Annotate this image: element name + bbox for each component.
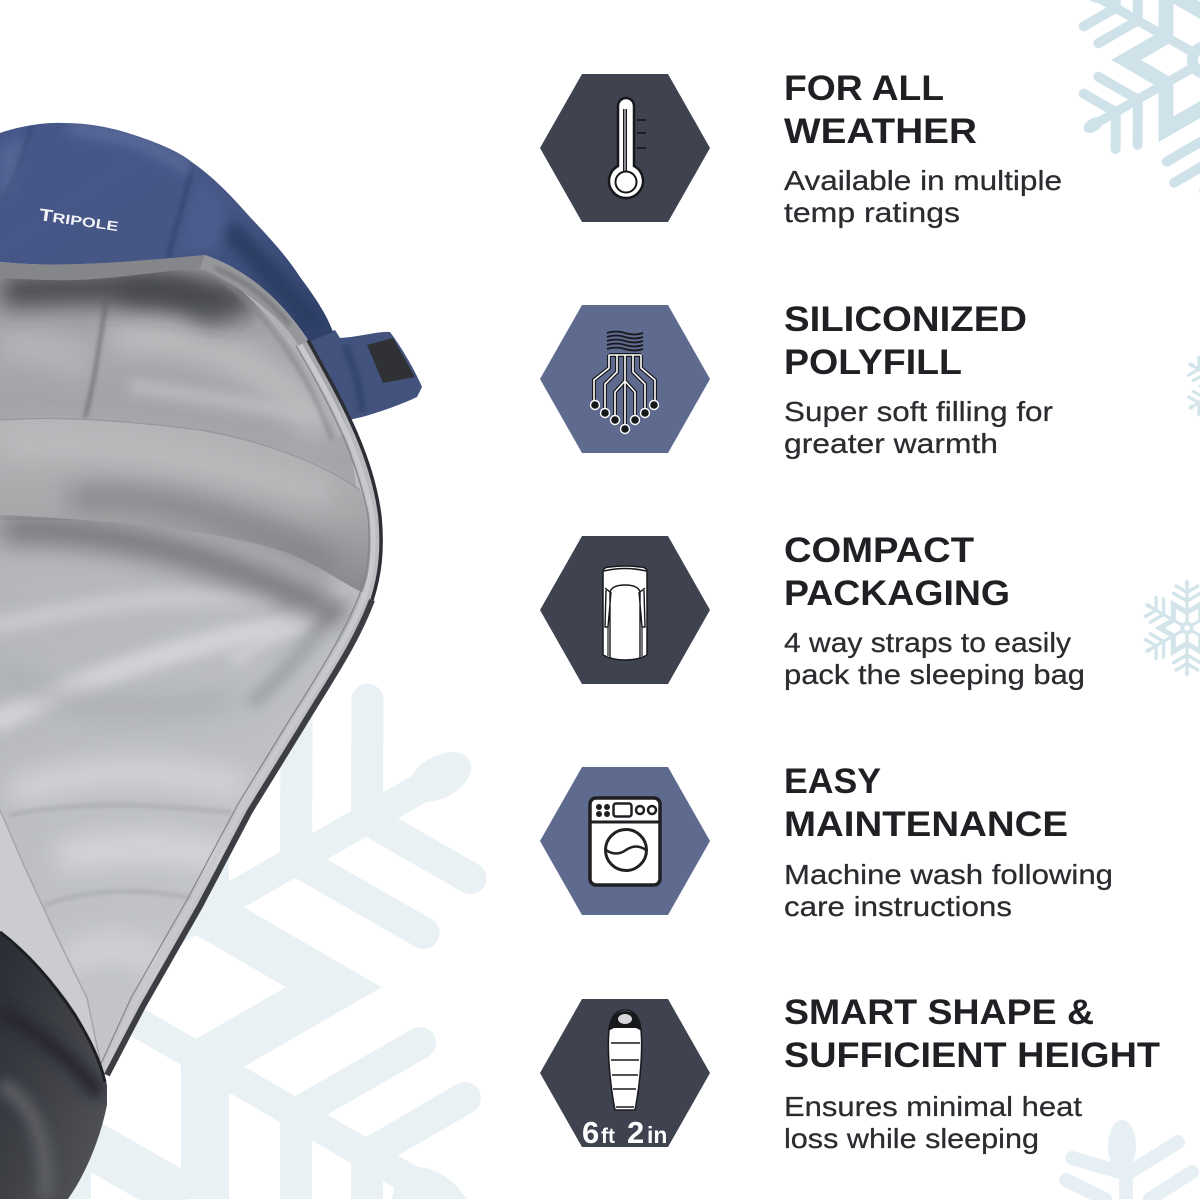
snowflake: right edge small xyxy=(1138,580,1200,676)
hexagon with mummy bag icon and height: in xyxy=(647,1122,667,1148)
hood lining lip xyxy=(0,255,207,280)
heading: SILICONIZED xyxy=(784,299,1027,339)
hexagon with mummy bag icon and height: ft xyxy=(601,1125,615,1148)
upper dome xyxy=(0,270,360,520)
heading: COMPACT xyxy=(784,530,974,570)
feature 4: easy maintenance xyxy=(540,761,1113,922)
snowflake: top right xyxy=(1064,0,1200,201)
photo: sleeping bag xyxy=(0,123,422,1199)
lower panel wrinkles xyxy=(0,590,345,960)
feature 2: siliconized polyfill xyxy=(540,299,1053,459)
heading: MAINTENANCE xyxy=(784,804,1068,844)
hood outer shell xyxy=(0,123,333,342)
heading: EASY xyxy=(784,761,881,801)
zipper edge xyxy=(100,340,381,1075)
hexagon with washing machine icon xyxy=(540,767,710,915)
hexagon with mummy bag icon and height: 2 xyxy=(627,1115,644,1150)
description: Ensures minimal heat xyxy=(784,1091,1082,1122)
description: 4 way straps to easily xyxy=(784,627,1071,658)
description: pack the sleeping bag xyxy=(784,659,1085,690)
hexagon with thermometer icon xyxy=(540,74,710,222)
snowflake: right edge partial xyxy=(1182,341,1200,431)
bolster xyxy=(0,418,372,592)
hexagon with mummy bag icon and height: 6 xyxy=(582,1115,599,1150)
hood tab with velcro xyxy=(308,330,422,420)
hexagon with packed bag icon xyxy=(540,536,710,684)
heading: PACKAGING xyxy=(784,573,1010,613)
description: Super soft filling for xyxy=(784,396,1053,427)
shadow under bolster xyxy=(0,529,340,615)
fold flap xyxy=(0,812,96,1048)
heading: WEATHER xyxy=(784,111,977,151)
logo text: TRIPOLE xyxy=(38,205,120,235)
heading: POLYFILL xyxy=(784,342,962,382)
snowflake: large lower left xyxy=(0,533,534,1199)
sleeping bag interior xyxy=(0,255,381,1075)
heading: SUFFICIENT HEIGHT xyxy=(784,1035,1160,1075)
description: loss while sleeping xyxy=(784,1123,1039,1154)
heading: FOR ALL xyxy=(784,68,944,108)
heading: SMART SHAPE & xyxy=(784,992,1094,1032)
hexagon with mummy bag icon and height xyxy=(540,999,710,1150)
description: Machine wash following xyxy=(784,859,1113,890)
feature 1: for all weather xyxy=(540,68,1062,228)
snowflake: bottom right xyxy=(1066,1120,1192,1199)
description: temp ratings xyxy=(784,197,960,228)
hexagon with fibre icon xyxy=(540,305,710,453)
description: care instructions xyxy=(784,891,1012,922)
description: greater warmth xyxy=(784,428,998,459)
dark outer shell at bottom xyxy=(0,932,107,1199)
description: Available in multiple xyxy=(784,165,1062,196)
feature 5: smart shape and height xyxy=(540,992,1160,1154)
feature 3: compact packaging xyxy=(540,530,1085,690)
